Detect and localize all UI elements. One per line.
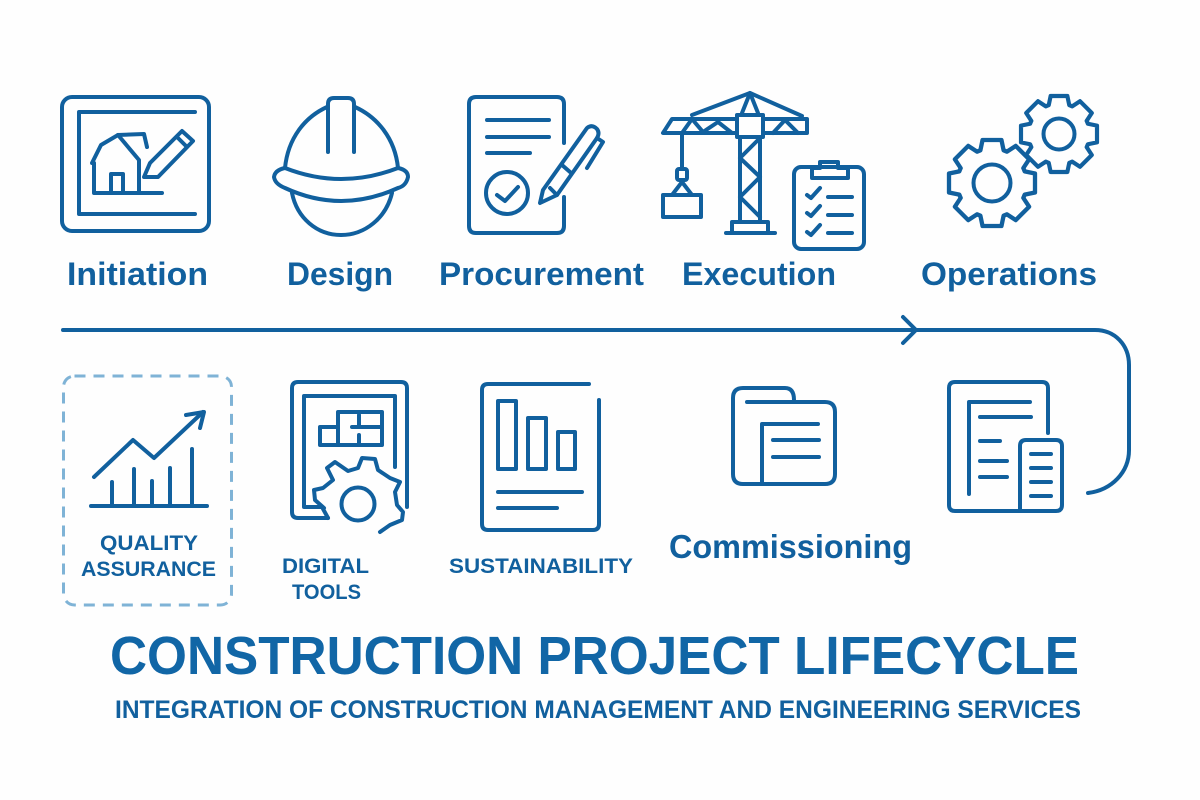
label: Digital Tools: [282, 555, 369, 604]
label: Commissioning: Commissioning: [669, 528, 912, 565]
icon: execution tower crane: [663, 93, 807, 233]
label: Quality Assurance: QUALITY: [100, 532, 198, 555]
label: Initiation: Initiation: [67, 256, 208, 292]
icon: operations gears: [949, 96, 1097, 226]
icon: commissioning folder: [733, 388, 835, 484]
icon: sustainability report: [482, 384, 599, 530]
label: Execution: Execution: [682, 256, 836, 292]
label: Quality Assurance: ASSURANCE: [81, 558, 216, 581]
label: Sustainability: SUSTAINABILITY: [449, 555, 633, 578]
subtitle: INTEGRATION OF CONSTRUCTION MANAGEMENT AND ENGINEERING SERVICES: [115, 696, 1081, 724]
label: Quality Assurance: [81, 532, 216, 581]
label: Digital Tools: DIGITAL: [282, 555, 369, 578]
icon: quality assurance chart: [91, 412, 207, 506]
icon: execution clipboard: [794, 162, 864, 249]
label: Design: Design: [287, 256, 393, 292]
icon: design hard hat: [274, 98, 408, 235]
title: CONSTRUCTION PROJECT LIFECYCLE: [110, 626, 1079, 686]
icon: initiation house sketch: [62, 97, 209, 231]
label: Procurement: Procurement: [439, 256, 644, 292]
label: Operations: Operations: [921, 256, 1097, 292]
panel: quality assurance dashed box: [64, 376, 232, 605]
icon: closeout documents: [949, 382, 1062, 511]
label: Digital Tools: TOOLS: [292, 581, 361, 604]
arrow: lifecycle connector: [63, 317, 1129, 493]
icon: procurement signed document: [469, 97, 603, 233]
icon: digital tools plan and gear: [292, 382, 407, 532]
